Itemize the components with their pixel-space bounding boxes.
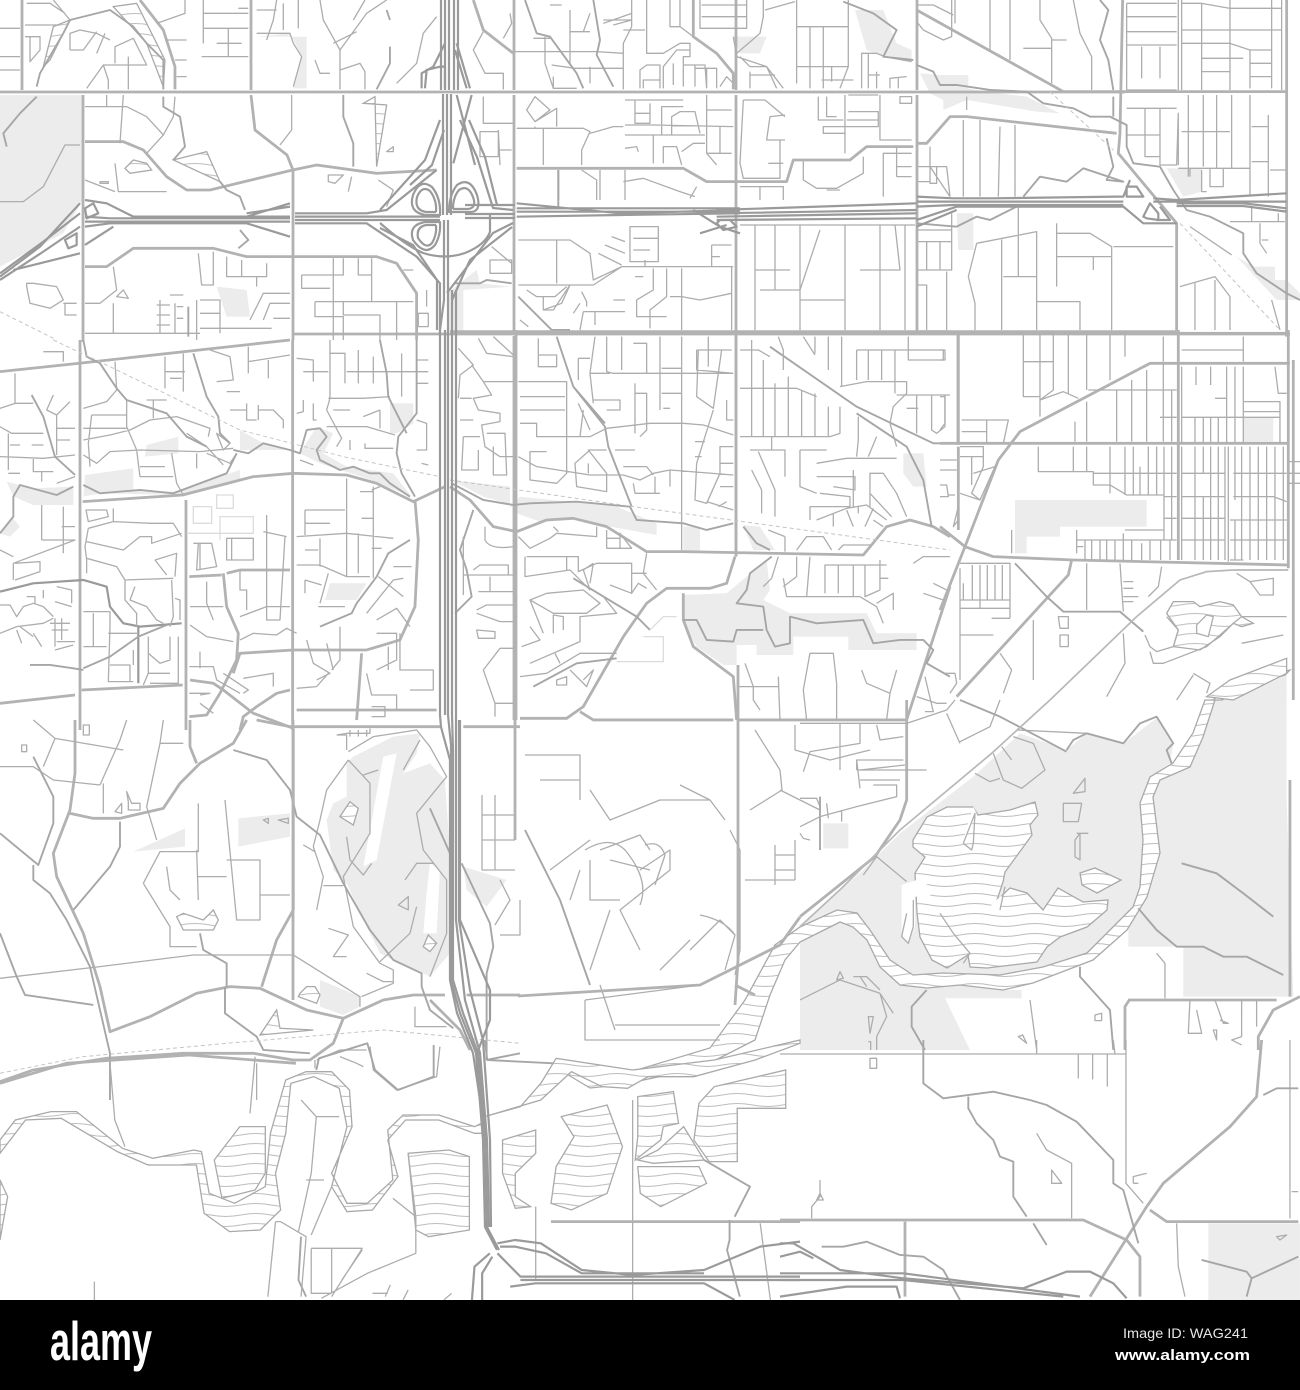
footer text: alamy — [50, 1310, 152, 1372]
main north-south freeway — [440, 0, 499, 1250]
region: interchange approach streets — [455, 170, 733, 330]
west freeway — [0, 170, 440, 333]
region: north-mid block streets — [740, 225, 915, 330]
region: south-west streets — [0, 720, 520, 1100]
south interchange — [472, 1240, 800, 1300]
region: central suburbs — [450, 330, 950, 720]
footer bar — [0, 1300, 1300, 1390]
footer text — [50, 1310, 1250, 1372]
region: north-east streets — [917, 0, 1300, 337]
river: east meander — [560, 700, 1215, 1088]
region: north-centre streets — [473, 0, 913, 200]
east freeway — [917, 180, 1287, 227]
footer text: Image ID: WAG241 — [1123, 1325, 1248, 1341]
footer text: www.alamy.com — [1114, 1347, 1250, 1364]
region: far-south river roads — [0, 1040, 800, 1300]
north interchange — [453, 43, 475, 165]
region: west-central suburbs — [0, 340, 445, 730]
region: north-west streets — [0, 0, 437, 340]
region: south-east roads — [780, 1040, 1298, 1300]
arterial road grid — [0, 0, 1290, 720]
region: eastern street grid — [940, 330, 1300, 700]
lake: central basin — [913, 802, 1108, 968]
region: south-east wetlands streets — [800, 700, 1300, 1050]
bottom river and lakes — [0, 1040, 800, 1240]
region: mid-south streets — [293, 665, 905, 1050]
central cloverleaf — [380, 120, 515, 330]
